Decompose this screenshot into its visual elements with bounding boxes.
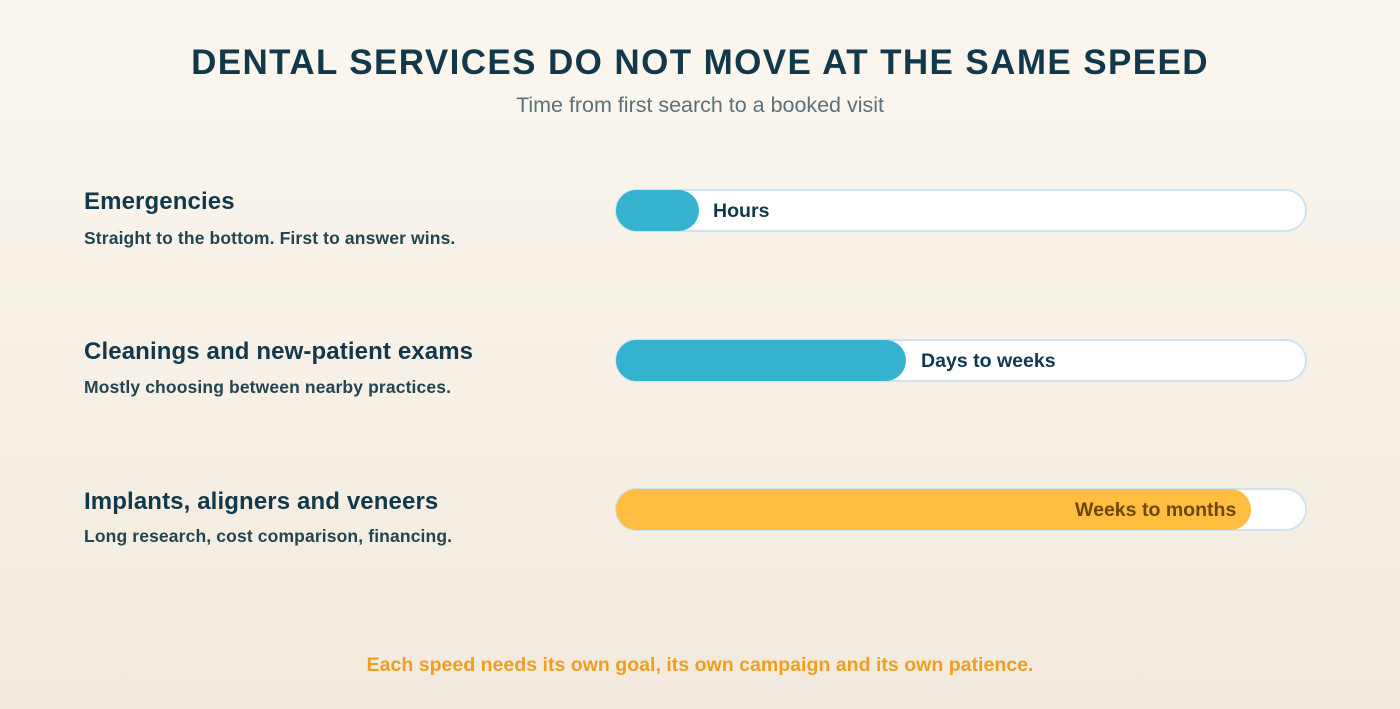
subtitle: Time from first search to a booked visit: [516, 93, 884, 117]
bar: weeks to months: [615, 488, 1307, 531]
heading: emergencies: Emergencies: [84, 188, 235, 215]
description: implants: Long research, cost comparison, financing.: [84, 526, 452, 546]
bar label: days to weeks: Days to weeks: [921, 350, 1056, 372]
heading: cleanings: Cleanings and new-patient exams: [84, 338, 473, 365]
row: implants: [84, 488, 1307, 546]
bar: days to weeks: [615, 339, 1307, 382]
bar label: weeks to months: Weeks to months: [1075, 499, 1236, 521]
description: cleanings: Mostly choosing between nearby practices.: [84, 377, 451, 397]
title: DENTAL SERVICES DO NOT MOVE AT THE SAME SPEED: [191, 43, 1209, 82]
heading: implants: Implants, aligners and veneers: [84, 488, 438, 515]
bar: hours: [615, 189, 1307, 232]
bar fill: hours: [616, 190, 699, 231]
bar fill: weeks to months: [616, 489, 1251, 530]
bar label: hours: Hours: [713, 200, 769, 222]
description: emergencies: Straight to the bottom. First to answer wins.: [84, 228, 455, 248]
bar fill: days to weeks: [616, 340, 906, 381]
closing note: Each speed needs its own goal, its own campaign and its own patience.: [367, 654, 1033, 676]
row: cleanings: [84, 338, 1307, 397]
row: emergencies: [84, 188, 1307, 248]
